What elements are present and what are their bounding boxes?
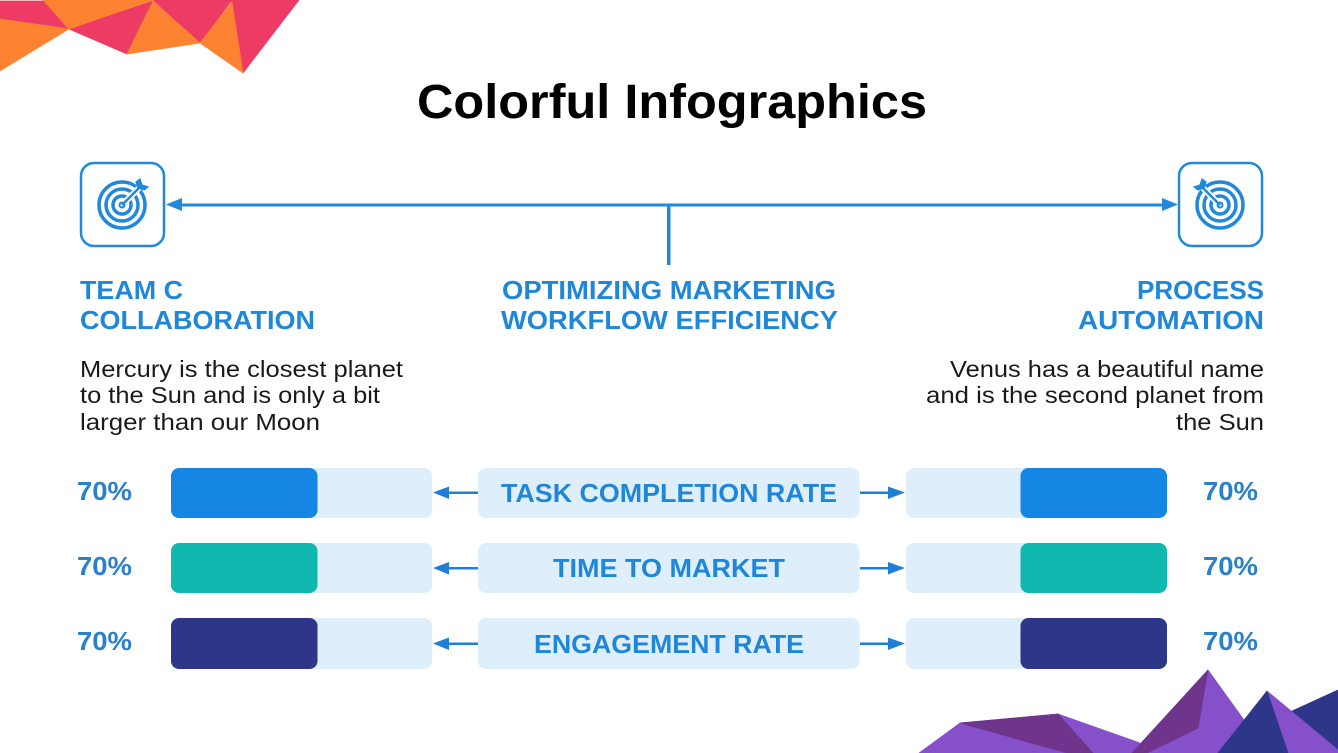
heading: optimizing marketing workflow efficiency	[501, 275, 838, 335]
text: venus description: and is the second planet from	[926, 382, 1264, 408]
title: Colorful Infographics	[417, 76, 927, 129]
row: time to market: TIME TO MARKET	[553, 553, 785, 583]
text: mercury description: Mercury is the closest planet	[80, 356, 404, 382]
row: task completion rate: 70%	[77, 476, 132, 506]
decoration: bottom-right polygons	[919, 670, 1338, 753]
row: engagement rate: 70%	[77, 626, 132, 656]
heading: optimizing marketing workflow efficiency: WORKFLOW EFFICIENCY	[501, 305, 838, 335]
arrow: horizontal double-headed connector	[166, 198, 1178, 265]
heading: team c collaboration: TEAM C	[80, 275, 183, 305]
text: mercury description: to the Sun and is only a bit	[80, 382, 381, 408]
icon: left target	[81, 163, 164, 246]
text: venus description: Venus has a beautiful name	[950, 356, 1264, 382]
text: venus description: the Sun	[1176, 409, 1264, 435]
heading: team c collaboration	[80, 275, 315, 335]
row: task completion rate	[77, 468, 1258, 518]
row: task completion rate: 70%	[1203, 476, 1258, 506]
text: venus description	[926, 356, 1264, 435]
row: task completion rate: TASK COMPLETION RATE	[501, 478, 837, 508]
text: mercury description	[80, 356, 404, 435]
row: time to market: 70%	[77, 551, 132, 581]
heading: process automation: AUTOMATION	[1078, 305, 1264, 335]
heading: process automation	[1078, 275, 1264, 335]
row: time to market	[77, 543, 1258, 593]
text: mercury description: larger than our Moon	[80, 409, 320, 435]
row: engagement rate	[77, 618, 1258, 669]
row: time to market: 70%	[1203, 551, 1258, 581]
icon: right target	[1179, 163, 1262, 246]
heading: team c collaboration: COLLABORATION	[80, 305, 315, 335]
row: engagement rate: 70%	[1203, 626, 1258, 656]
decoration: top-left polygons	[0, 0, 299, 73]
row: engagement rate: ENGAGEMENT RATE	[534, 629, 804, 659]
heading: process automation: PROCESS	[1137, 275, 1264, 305]
heading: optimizing marketing workflow efficiency: OPTIMIZING MARKETING	[502, 275, 836, 305]
